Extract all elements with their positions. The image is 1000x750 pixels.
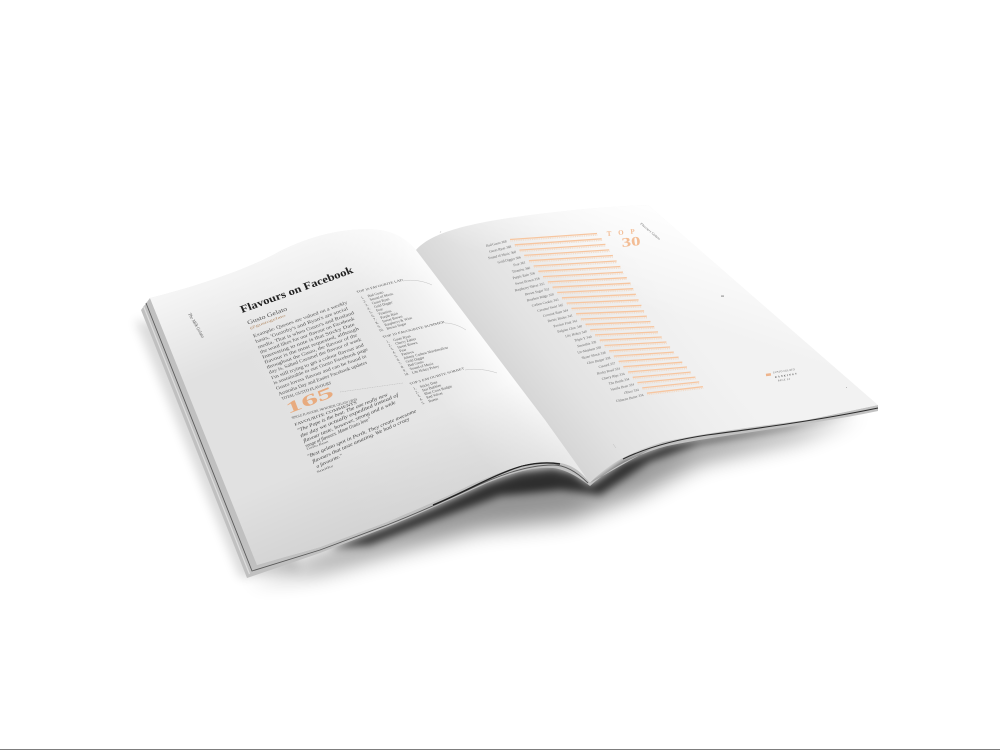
body copy paragraphs: media. That is when Gusto's and Rosland [257,311,356,350]
bar labels: Gusto Ryan 368 [489,245,512,254]
bar labels: Gold Digger 366 [497,255,521,265]
arc: sorbet heading flourish [465,369,497,373]
text column: Gusto Gelato article [247,286,376,397]
body copy paragraphs [253,300,376,397]
list: top 5 favourite sorbet: Star Bubbles [421,383,442,392]
body copy paragraphs: Example: Queues are valued on a weekly [253,300,349,339]
logo: orange mark and small text: PAGE 14 [778,378,791,382]
attribution one: Gusto Ryan [306,439,330,451]
bar labels: Sweet Brown 356 [515,276,540,286]
quote two: flavours that taste amazing. We had a crazy [312,417,412,465]
bar labels: Bourbon Ridge 350 [526,292,554,302]
divider beside number [340,383,403,392]
back cover and page stack [141,298,878,578]
list: top 10 favourite summer [381,320,469,377]
list: top 10 favourite summer: Fear [399,348,408,353]
list: top 10 favourite summer: 1. [385,340,390,344]
list: top 10 favourite lad: 10. [378,328,385,333]
list: top 10 favourite summer: 3. [390,347,394,351]
quote one [297,393,400,449]
bar labels: Cherry Ripe 334 [601,372,625,381]
list: top 10 favourite summer: Sound of Music [409,362,435,371]
list: top 5 favourite sorbet: Bueno [428,397,439,403]
bottom edge line [0,749,1000,750]
bars [510,234,703,393]
list: top 5 favourite sorbet: 5. [421,401,426,405]
list: top 10 favourite lad: Purple Rain [379,312,399,320]
bar labels: Bernie Brulee 341 [547,314,573,323]
list: top 10 favourite summer: Cherry Zabler [394,337,418,346]
heading: favourite comments: FAVOURITE COMMENTS [294,401,357,427]
list: top 10 favourite lad: TOP 10 FAVOURITE LAD [355,278,405,294]
body copy paragraphs: Gusto lovers flavour and can be found in [275,354,368,392]
left page content [186,265,497,474]
attribution two: Smithy [316,463,335,474]
big number: 165: 165 [283,384,336,418]
bar labels: Caramel Swirl 345 [537,303,564,313]
running title: right page: Flavours Gelato [639,221,661,241]
list: top 10 favourite summer: Lite Hokey Pokey [411,365,440,375]
list: top 10 favourite summer: 8. [400,365,405,369]
list: top 10 favourite lad: 7. [373,317,378,322]
list: top 10 favourite lad: 2. [362,299,367,303]
quote one: the day we actually expedited instead of [300,393,400,439]
list: top 10 favourite summer: Pavlova [401,350,415,357]
list: top 5 favourite sorbet [408,366,477,405]
body copy paragraphs: I'm still trying to get a colour flavour and [271,343,366,381]
bar labels: Choc Burger 338 [586,356,611,365]
bar labels: Oliver 334 [624,388,639,395]
bar labels: Fear 361 [513,261,526,267]
bar labels: Sound of Music 368 [488,250,517,260]
body copy paragraphs: throughout the Gusto, the flavour of the [266,333,358,371]
small page marks [440,231,847,448]
right page [416,205,878,483]
right page content [440,221,847,448]
list: top 5 favourite sorbet: 3. [417,394,421,398]
title: TOP 30: 30 [621,233,641,250]
bar labels: Bad Gusto 368 [486,239,507,248]
bar labels [486,239,644,403]
bar labels: Custard 337 [598,361,616,369]
bar labels: Passion Fruit 341 [553,319,578,328]
list: top 10 favourite summer: Gold Digger [405,356,426,364]
bar labels: Skater Shock 338 [581,351,606,360]
bar labels: Raspberry Shiraz 355 [514,282,545,292]
body copy paragraphs: Australia Day and Easter Facebook updates [278,361,368,397]
list: top 5 favourite sorbet: 2. [415,390,419,394]
list: top 10 favourite lad: Bad Gusto [367,290,384,298]
running title: left margin: The Milk Gelato [186,312,205,340]
bar labels: Purple Rain 356 [512,271,536,280]
body copy paragraphs: is sustainable to our Gusto Facebook page [273,348,369,386]
quote two [307,409,418,470]
list: top 10 favourite summer: 2. [388,343,392,347]
list: top 10 favourite lad: 3. [364,303,369,307]
body copy paragraphs: basis, 'Gustoby's and Ryan's are social [255,307,350,345]
list: top 10 favourite summer: 5. [394,354,399,358]
bar labels: Smoothie 339 [577,340,597,348]
book shadow [135,320,860,580]
body copy paragraphs: flavour is the most requested, although [264,327,361,366]
list: top 5 favourite sorbet: Sticky Date [419,380,439,389]
list: top 10 favourite lad: Fear [375,307,384,313]
logo: orange mark and small text [766,368,797,382]
body copy paragraphs: the word likes for our flavour on Facebook [260,317,356,355]
list: top 10 favourite lad [355,278,427,333]
section heading: total Facebook engagement: TOTAL GUSTO FLAVOURS [281,380,332,401]
list: top 10 favourite lad: 4. [366,307,371,311]
logo: orange mark and small text: RANKINGS [775,372,797,379]
bar labels: Vanilla Bean 334 [610,382,635,392]
list: top 10 favourite lad: 6. [371,314,375,318]
list: top 10 favourite lad: 8. [375,321,380,325]
bar labels: The Bomb 334 [608,377,630,386]
list: top 10 favourite lad: Raspberry & Wine [384,316,413,327]
caption under number: SINGLE FLAVOURS, 340 WORDS, GELATO LIKES [291,397,358,421]
handle line: @gustogelato [249,313,287,330]
bar labels: Triple Y 340 [574,335,592,343]
arc: summer heading flourish [445,323,466,330]
list: top 10 favourite summer: 10. [403,372,410,377]
bar labels: Ultimate Butter 334 [616,393,644,403]
list: top 10 favourite summer: 6. [396,358,401,362]
list: top 10 favourite summer: TOP 10 FAVOURITE SUMMER [381,320,447,339]
title: TOP 30: TOP [606,228,636,238]
quote one: range of flavours. Mmm Gusto love" [305,417,372,449]
quote two: a favourite." [316,453,344,470]
list: top 10 favourite lad: Sweet Brown [382,315,403,323]
list: top 10 favourite summer: 4. [392,350,397,355]
bar chart: top 30 flavours [486,234,703,403]
bar ticks [510,235,703,395]
list: top 10 favourite lad: Gold Digger [373,300,394,309]
list: top 5 favourite sorbet: Red Velvet [425,391,444,400]
bar labels: Belgian Choc 340 [557,324,583,334]
bar labels: Tiramisu 360 [512,266,531,274]
body copy paragraphs: Interesting to note is that Sticky Date [262,323,356,360]
arc: top 10 heading flourish [403,280,432,285]
list: top 5 favourite sorbet: 1. [412,386,417,391]
logo: orange mark and small text: GUSTO GELATO [773,368,795,374]
quote two: "Best gelato spot in Perth. They create awesome [307,409,418,460]
quote one: flavour taste, however, strong and a wide [303,400,398,444]
quote one: "The Pope is the best. The one really new [297,393,389,434]
list: top 10 favourite lad: 5. [369,310,373,314]
list: top 10 favourite lad: 1. [360,296,365,300]
list: top 10 favourite lad: Sound of Music [369,292,395,302]
list: top 10 favourite lad: 9. [377,325,382,329]
bar labels: Brown Sugar 352 [525,287,550,297]
body copy paragraphs: day is, Salted Caramel the flavour of week [268,337,363,376]
list: top 10 favourite summer: Bad Gusto [407,360,425,367]
list: top 10 favourite summer: 9. [402,369,407,373]
list: top 10 favourite lad: Gusto Ryan [371,297,390,305]
title: TOP 30 [606,228,641,250]
heading: Flavours on Facebook: Flavours on Facebook [239,265,355,316]
list: top 5 favourite sorbet: TOP 5 FAVOURITE SORBET [408,366,465,386]
list: top 5 favourite sorbet: 4. [419,397,424,402]
bar labels: Lite Hokey 340 [565,329,587,338]
list: top 10 favourite summer: 7. [398,361,403,365]
list: top 10 favourite summer: Gusto Ryan [392,334,412,342]
bar labels: Coconut Rum 344 [543,308,569,318]
bar labels: Carbon Cookie 345 [531,298,559,308]
list: top 10 favourite summer: Johnny Cashew Marshmallow [403,346,449,360]
list: top 10 favourite lad: Tiramisu [377,309,393,316]
left page [150,229,590,565]
bar labels: Un-Mayhem 338 [577,345,602,355]
list: top 10 favourite summer: Sweet Brown [396,341,418,349]
list: top 10 favourite lad: Brown Sugar [386,322,408,331]
subheading: Gusto Gelato: Gusto Gelato [247,307,288,326]
bar labels: Rocky Road 334 [596,367,621,376]
list: top 5 favourite sorbet: Blue Cross Budgie [423,384,453,396]
